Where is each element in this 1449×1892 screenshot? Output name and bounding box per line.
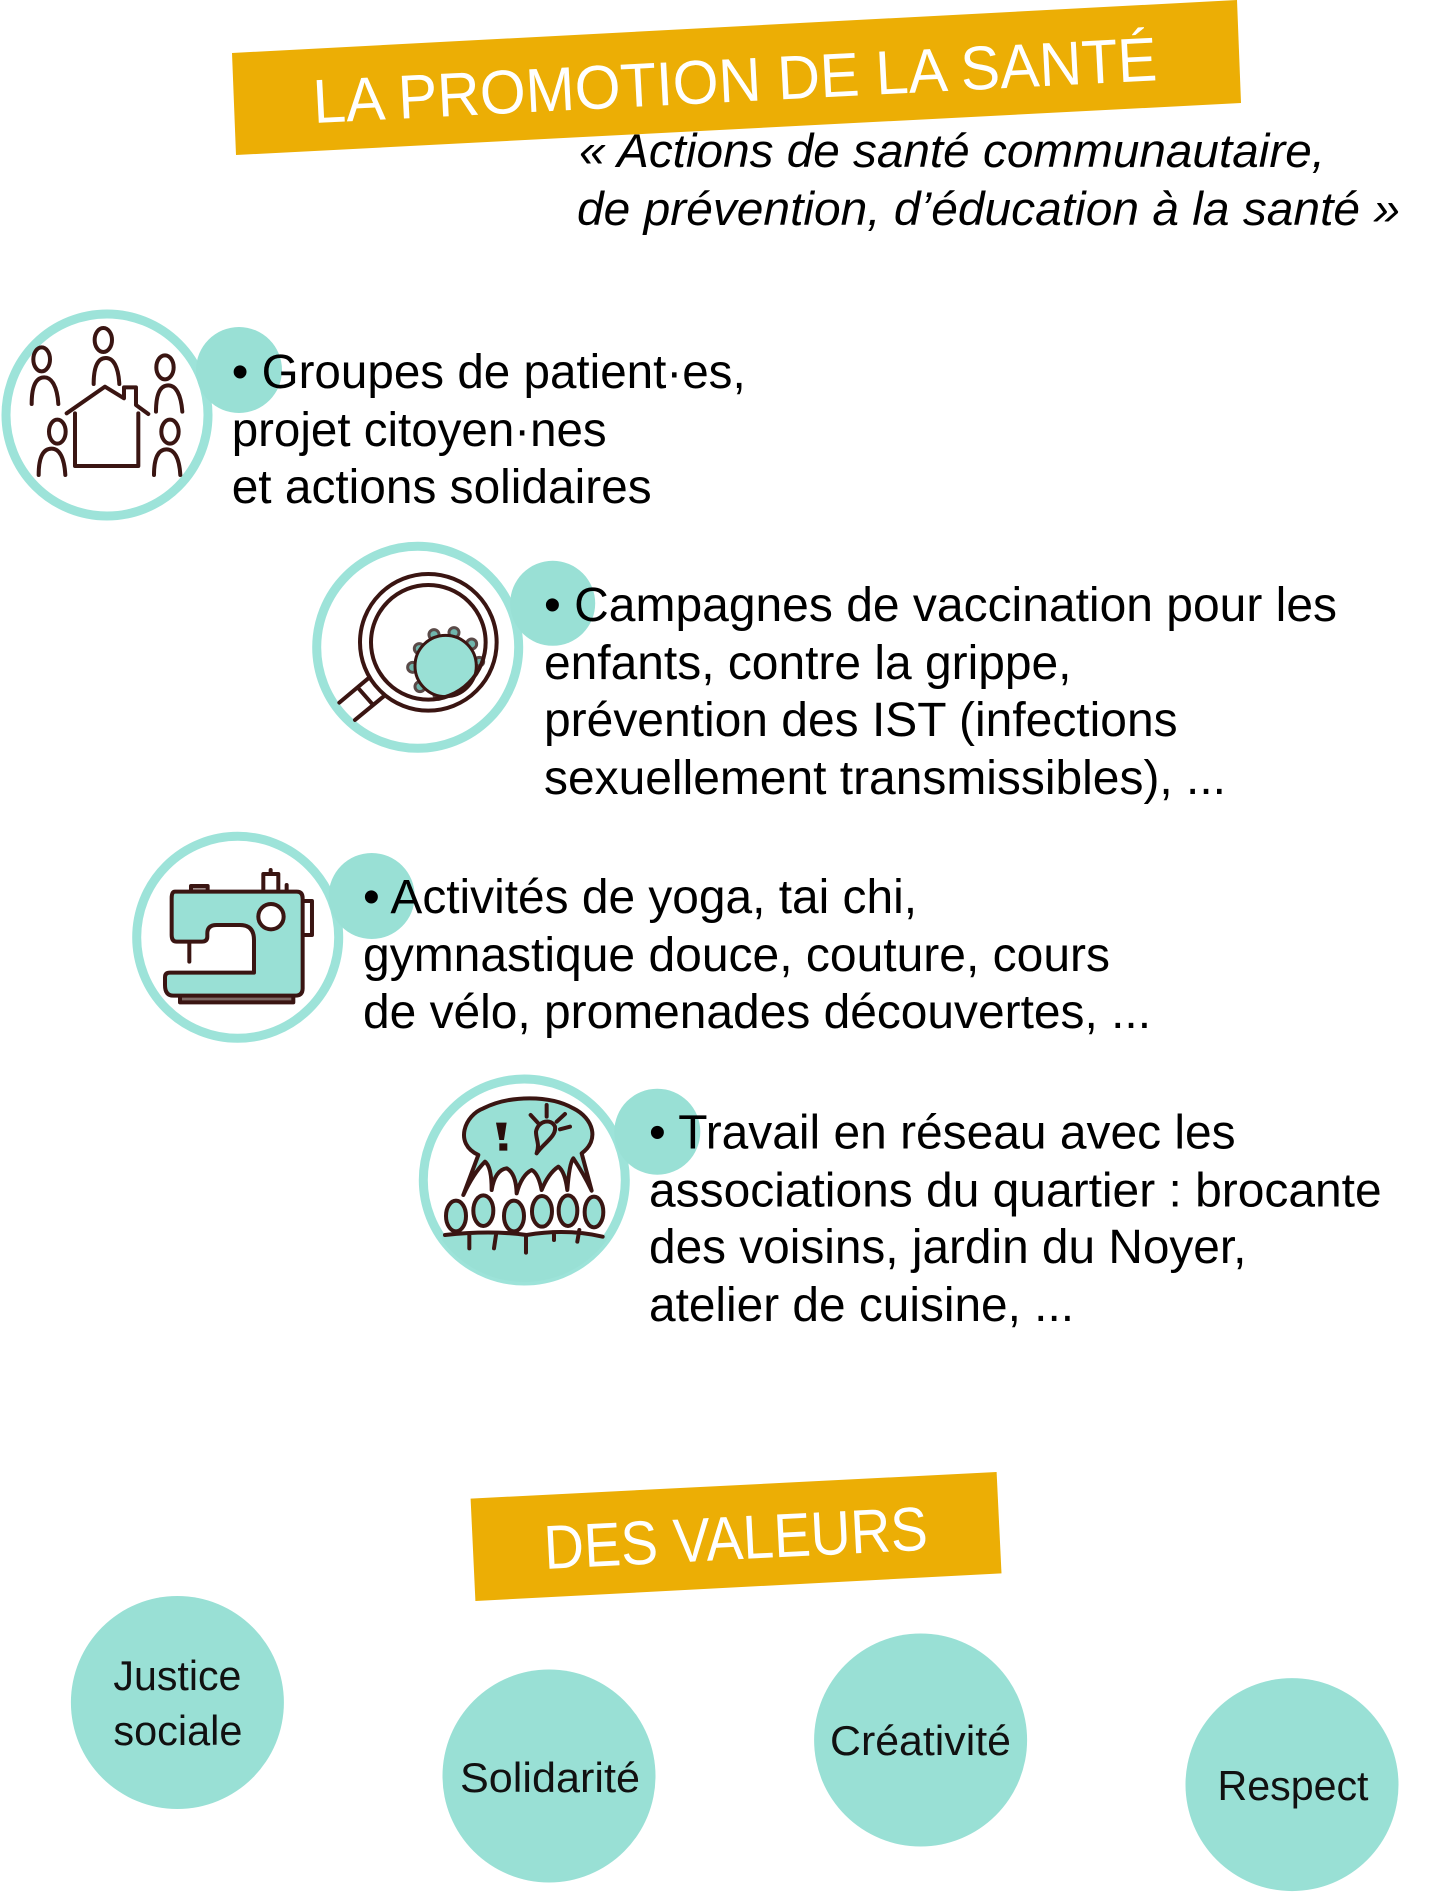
text block: sexuellement transmissibles), ... (544, 752, 1226, 805)
bullet circle (196, 327, 282, 413)
value: respect (1186, 1678, 1398, 1891)
panel: groupes de patients (6, 314, 746, 516)
text block: prévention des IST (infections (544, 694, 1178, 747)
subtitle: de prévention, d’éducation à la santé » (577, 182, 1400, 235)
icon: sewing machine (137, 836, 339, 1038)
title text: LA PROMOTION DE LA SANTÉ (311, 25, 1159, 137)
text block: et actions solidaires (232, 461, 652, 514)
value: respect: Respect (1218, 1762, 1369, 1809)
bullet circle (614, 1089, 700, 1175)
value: justice sociale (71, 1596, 284, 1809)
bullet circle (510, 561, 595, 646)
value: solidarité: Solidarité (460, 1754, 640, 1801)
title banner (232, 0, 1241, 155)
panel: travail en réseau (423, 1079, 1382, 1332)
value: créativité: Créativité (830, 1717, 1011, 1764)
text block: • Travail en réseau avec les (649, 1106, 1236, 1160)
value: justice sociale: sociale (113, 1707, 242, 1754)
text block (649, 1106, 1382, 1332)
icon: group with speech bubble (423, 1079, 625, 1287)
panel: activités (137, 836, 1151, 1039)
value: justice sociale: Justice (113, 1652, 241, 1699)
text block: de vélo, promenades découvertes, ... (363, 986, 1151, 1039)
text block: gymnastique douce, couture, cours (363, 929, 1110, 982)
icon: magnifier and virus (317, 546, 519, 748)
panel: campagnes de vaccination (317, 546, 1337, 805)
value: solidarité (442, 1670, 656, 1882)
subtitle (577, 124, 1400, 235)
values banner (471, 1472, 1002, 1601)
subtitle: « Actions de santé communautaire, (579, 124, 1325, 177)
value: créativité (814, 1634, 1027, 1846)
text block: • Groupes de patient·es, (232, 346, 746, 399)
text block: associations du quartier : brocante (649, 1164, 1382, 1218)
text block: des voisins, jardin du Noyer, (649, 1221, 1246, 1274)
text block (232, 346, 746, 514)
values heading text: DES VALEURS (542, 1495, 929, 1583)
text block: enfants, contre la grippe, (544, 637, 1072, 690)
text block (544, 579, 1337, 805)
text block: • Activités de yoga, tai chi, (363, 871, 917, 924)
bullet circle (329, 853, 415, 939)
text block: projet citoyen·nes (232, 404, 607, 457)
text block: • Campagnes de vaccination pour les (544, 579, 1337, 632)
text block (363, 871, 1151, 1039)
text block: atelier de cuisine, ... (649, 1279, 1074, 1332)
icon: house and people (6, 314, 208, 516)
